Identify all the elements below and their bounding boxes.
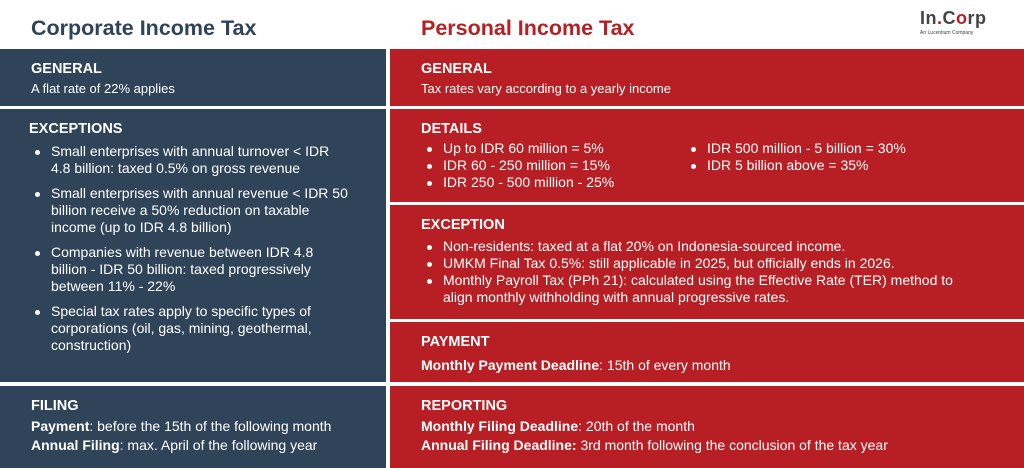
panel: personal general xyxy=(390,49,1024,106)
panel: corporate exceptions: Small enterprises with annual turnover < IDR 4.8 billion: taxed 0.5% on gross revenue xyxy=(51,143,329,176)
panel: personal general: GENERAL xyxy=(421,61,492,77)
panel: personal details: IDR 60 - 250 million = 15% xyxy=(443,157,610,173)
panel: personal details: IDR 5 billion above = 35% xyxy=(707,157,868,173)
panel: personal payment: PAYMENT xyxy=(421,334,490,350)
panel: personal details: IDR 250 - 500 million - 25% xyxy=(443,174,614,190)
panel: corporate filing: Payment: before the 15th of the following month xyxy=(31,418,331,434)
panel: personal reporting xyxy=(390,386,1024,468)
panel: corporate exceptions: Small enterprises with annual revenue < IDR 50 billion receive a 50% reduction on taxable income (up to IDR 4.8 billion) xyxy=(51,185,348,235)
logo: An Lucentium Company xyxy=(920,30,973,36)
title: personal: Personal Income Tax xyxy=(421,16,634,40)
panel: personal details: DETAILS xyxy=(421,121,482,137)
panel: personal exception: EXCEPTION xyxy=(421,217,505,233)
title: corporate: Corporate Income Tax xyxy=(31,16,256,40)
panel: personal exception xyxy=(390,205,1024,319)
panel: personal exception: Monthly Payroll Tax (PPh 21): calculated using the Effective Rate (TER) method to align monthly withholding with annual progressive rates. xyxy=(443,272,953,305)
panel: personal payment xyxy=(390,322,1024,382)
panel: corporate exceptions: Companies with revenue between IDR 4.8 billion - IDR 50 billion: taxed progressively between 11% - 22% xyxy=(51,244,313,294)
panel: personal details xyxy=(390,109,1024,202)
panel: personal general: Tax rates vary according to a yearly income xyxy=(421,81,671,96)
panel: personal exception: Non-residents: taxed at a flat 20% on Indonesia-sourced income. xyxy=(443,238,845,254)
panel: personal details: IDR 500 million - 5 billion = 30% xyxy=(707,140,906,156)
panel: corporate general: A flat rate of 22% applies xyxy=(31,81,175,96)
panel: corporate general xyxy=(0,49,386,106)
panel: corporate filing: FILING xyxy=(31,398,79,414)
panel: personal reporting: Annual Filing Deadline: 3rd month following the conclusion of the tax year xyxy=(421,437,888,453)
panel: corporate exceptions xyxy=(0,109,386,382)
panel: corporate filing: Annual Filing: max. April of the following year xyxy=(31,437,317,453)
panel: corporate exceptions: EXCEPTIONS xyxy=(29,121,122,137)
panel: personal payment: Monthly Payment Deadline: 15th of every month xyxy=(421,357,731,373)
panel: corporate exceptions: Special tax rates apply to specific types of corporations (oil, gas, mining, geothermal, construction) xyxy=(51,303,312,353)
panel: personal exception: UMKM Final Tax 0.5%: still applicable in 2025, but officially ends in 2026. xyxy=(443,255,895,271)
panel: personal reporting: Monthly Filing Deadline: 20th of the month xyxy=(421,418,695,434)
panel: personal details: Up to IDR 60 million = 5% xyxy=(443,140,604,156)
panel: personal reporting: REPORTING xyxy=(421,398,507,414)
logo: In.Corp xyxy=(920,8,987,28)
panel: corporate filing xyxy=(0,386,386,468)
panel: corporate general: GENERAL xyxy=(31,61,102,77)
